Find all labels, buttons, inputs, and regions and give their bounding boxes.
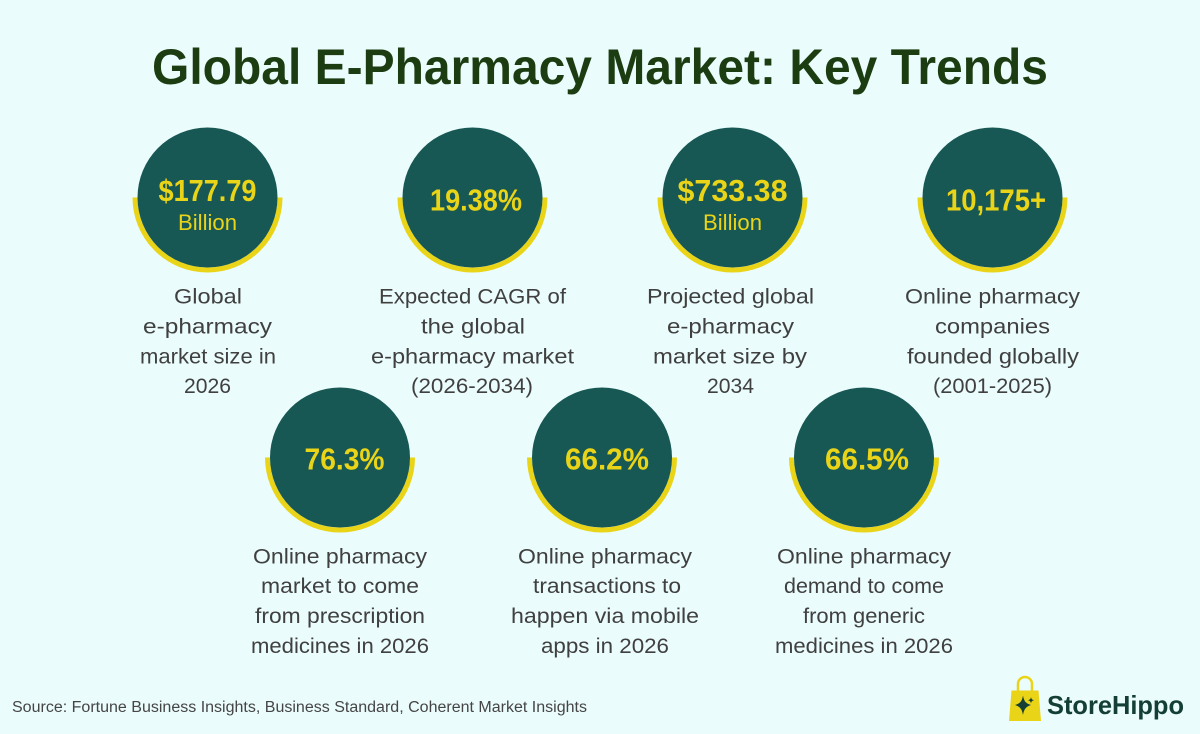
icon: circle badge	[135, 128, 280, 270]
description	[647, 284, 814, 398]
description: Projected global	[647, 284, 814, 308]
description: e-pharmacy	[143, 314, 272, 338]
description	[775, 544, 953, 658]
description: e-pharmacy market	[371, 344, 574, 368]
description: market to come	[261, 574, 419, 598]
description: market size by	[653, 344, 807, 368]
value: $733.38	[678, 173, 788, 208]
panel: prescription medicines	[251, 388, 429, 658]
value: 66.5%	[825, 442, 909, 476]
description: 2034	[707, 374, 754, 398]
panel: market size 2026	[135, 128, 280, 398]
description: (2001-2025)	[933, 374, 1052, 398]
description: Online pharmacy	[518, 544, 692, 568]
description: Online pharmacy	[905, 284, 1080, 308]
description: Online pharmacy	[777, 544, 951, 568]
description: 2026	[184, 374, 231, 398]
source note: Source: Fortune Business Insights, Business Standard, Coherent Market Insights	[12, 699, 587, 716]
description: Global	[174, 284, 242, 308]
icon: circle badge	[400, 128, 545, 270]
panel: online pharmacy companies	[905, 128, 1080, 398]
description: from prescription	[255, 604, 425, 628]
wordmark: StoreHippo	[1047, 690, 1184, 720]
title: Global E-Pharmacy Market: Key Trends	[152, 39, 1048, 95]
logo	[1009, 677, 1184, 721]
description: medicines in 2026	[251, 634, 429, 658]
description: market size in	[140, 344, 276, 368]
description	[140, 284, 276, 398]
description	[905, 284, 1080, 398]
panel: generic medicines	[775, 388, 953, 658]
description: e-pharmacy	[667, 314, 794, 338]
icon: circle badge	[920, 128, 1065, 270]
description: Expected CAGR of	[379, 284, 566, 308]
icon: circle badge	[792, 388, 936, 530]
icon: circle badge	[660, 128, 805, 270]
description	[251, 544, 429, 658]
panel: mobile apps	[511, 388, 699, 658]
value: 19.38%	[430, 182, 522, 218]
panel: expected CAGR	[371, 128, 574, 398]
description: happen via mobile	[511, 604, 699, 628]
value: $177.79	[158, 173, 256, 208]
description: demand to come	[784, 574, 944, 598]
description: transactions to	[533, 574, 681, 598]
description	[511, 544, 699, 658]
panel: projected market size 2034	[647, 128, 814, 398]
icon: circle badge	[268, 388, 412, 530]
description: companies	[935, 314, 1050, 338]
value: 76.3%	[304, 442, 384, 476]
description: from generic	[803, 604, 925, 628]
description: (2026-2034)	[411, 374, 533, 398]
icon: shopping bag	[1009, 677, 1041, 721]
icon: circle badge	[530, 388, 674, 530]
value: 10,175+	[946, 182, 1046, 218]
description: founded globally	[907, 344, 1079, 368]
description: Online pharmacy	[253, 544, 427, 568]
unit: Billion	[703, 210, 762, 235]
description	[371, 284, 574, 398]
unit: Billion	[178, 210, 237, 235]
description: apps in 2026	[541, 634, 669, 658]
value: 66.2%	[565, 442, 649, 476]
description: the global	[421, 314, 525, 338]
description: medicines in 2026	[775, 634, 953, 658]
